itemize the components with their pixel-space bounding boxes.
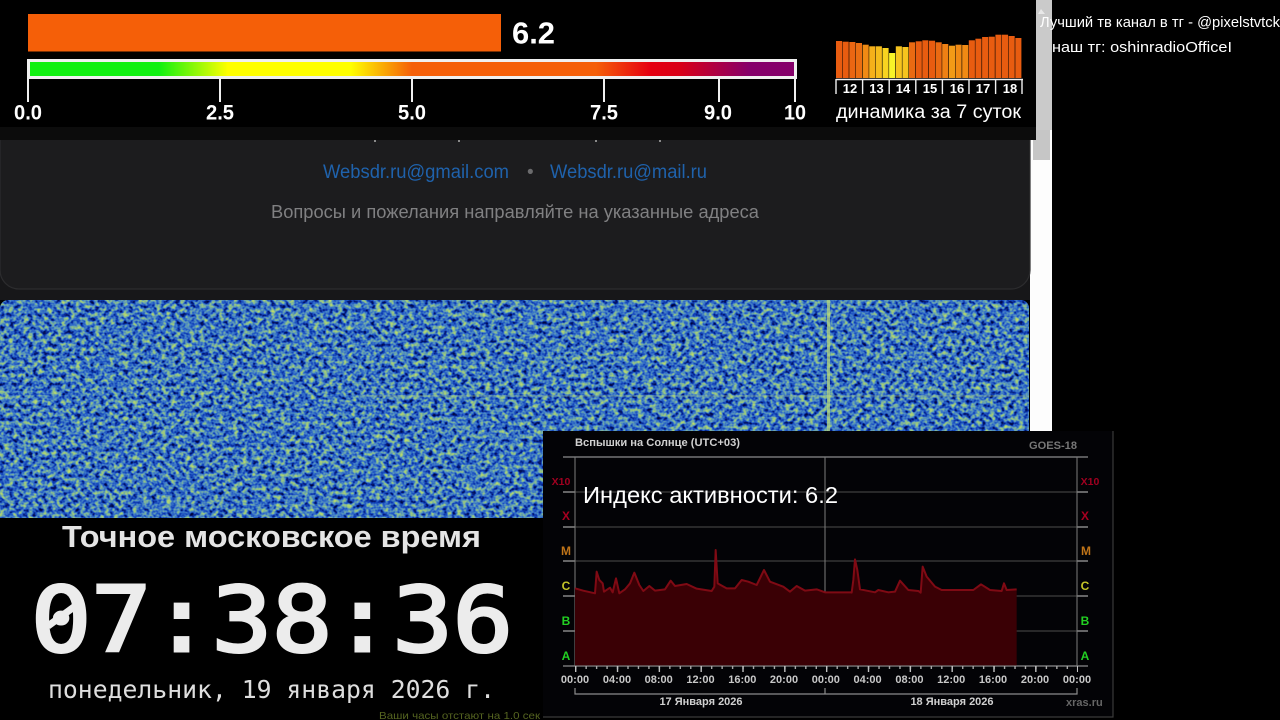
time axis labels: 12:00 (937, 674, 965, 686)
chart: seven day dynamics (836, 35, 1023, 123)
current index bar (28, 14, 501, 52)
satellite label: GOES-18 (1029, 440, 1077, 452)
time axis labels: 16:00 (728, 674, 756, 686)
colour scale (28, 60, 796, 78)
time axis labels: 12:00 (686, 674, 715, 686)
chart title: Вспышки на Солнце (UTC+03) (575, 437, 740, 449)
day labels: 17 (976, 81, 990, 96)
channel promo text: Лучший тв канал в тг - @pixelstvtck (1040, 14, 1280, 31)
time axis labels: 16:00 (979, 674, 1007, 686)
day labels: 13 (869, 81, 884, 96)
scale labels: 10 (784, 102, 806, 124)
grid lines (563, 457, 1088, 669)
time axis labels: 00:00 (812, 674, 840, 686)
time axis labels: 20:00 (1021, 674, 1049, 686)
contact email links: Websdr.ru@mail.ru (550, 162, 707, 183)
browser page background strip (1030, 130, 1052, 431)
flare class labels right: A (1081, 649, 1090, 663)
panel: solar flares chart (543, 431, 1113, 717)
day labels: 12 (843, 81, 857, 96)
flare class labels right: B (1081, 614, 1090, 628)
clock digits: 07:38:36 (31, 568, 513, 673)
current index value: 6.2 (512, 16, 555, 50)
day labels: 14 (896, 81, 911, 96)
flare class labels right: X10 (1081, 476, 1099, 488)
panel: spectrogram waterfall (0, 300, 1030, 518)
scale labels: 0.0 (14, 102, 42, 124)
flare class labels right: C (1081, 579, 1090, 593)
scrollbar (1033, 0, 1052, 160)
flare class labels right: M (1081, 544, 1091, 558)
time axis labels: 04:00 (603, 674, 631, 686)
panel: activity index top bar (0, 0, 1036, 140)
contact email links: • (527, 162, 534, 183)
day labels: 16 (950, 81, 964, 96)
clock date: понедельник, 19 января 2026 г. (48, 675, 495, 704)
contact email links (323, 162, 707, 183)
flare class labels left: X10 (552, 476, 570, 488)
channel promo text (1040, 14, 1280, 56)
time axis labels: 08:00 (895, 674, 923, 686)
scale labels: 5.0 (398, 102, 426, 124)
contact email links: Websdr.ru@gmail.com (323, 162, 509, 183)
day labels (843, 81, 1017, 96)
flare class labels left: B (562, 614, 571, 628)
activity index overlay: Индекс активности: 6.2 (583, 482, 838, 508)
time axis labels: 00:00 (1063, 674, 1091, 686)
time axis labels (561, 674, 1091, 686)
day labels: 15 (923, 81, 937, 96)
time axis labels: 00:00 (561, 674, 589, 686)
time axis labels: 20:00 (770, 674, 798, 686)
date label day two: 18 Января 2026 (910, 696, 994, 708)
panel: contact card (0, 130, 1030, 300)
date brackets (575, 688, 1077, 694)
time axis labels: 08:00 (645, 674, 673, 686)
scale labels: 2.5 (206, 102, 234, 124)
flare class labels left: C (562, 579, 571, 593)
time axis labels: 04:00 (854, 674, 882, 686)
contact note: Вопросы и пожелания направляйте на указанные адреса (271, 202, 760, 222)
panel: moscow time clock (0, 518, 543, 720)
scale labels: 7.5 (590, 102, 618, 124)
source label: xras.ru (1066, 697, 1103, 709)
flare class labels left: M (561, 544, 571, 558)
flare class labels right (1081, 476, 1099, 663)
scale labels: 9.0 (704, 102, 732, 124)
flare class labels left: A (562, 649, 571, 663)
clock heading: Точное московское время (62, 519, 481, 554)
scale ticks (28, 78, 795, 102)
date label day one: 17 Января 2026 (659, 696, 743, 708)
channel promo text: наш тг: oshinradioOfficeI (1052, 39, 1232, 56)
dynamics caption: динамика за 7 суток (836, 102, 1022, 123)
flare class labels right: X (1081, 509, 1089, 523)
flare class labels left (552, 476, 571, 663)
day axis (836, 79, 1023, 94)
carrier line (827, 300, 830, 431)
day labels: 18 (1003, 81, 1017, 96)
flare area curve (575, 550, 1017, 665)
flare class labels left: X (562, 509, 570, 523)
scale labels (14, 102, 806, 124)
